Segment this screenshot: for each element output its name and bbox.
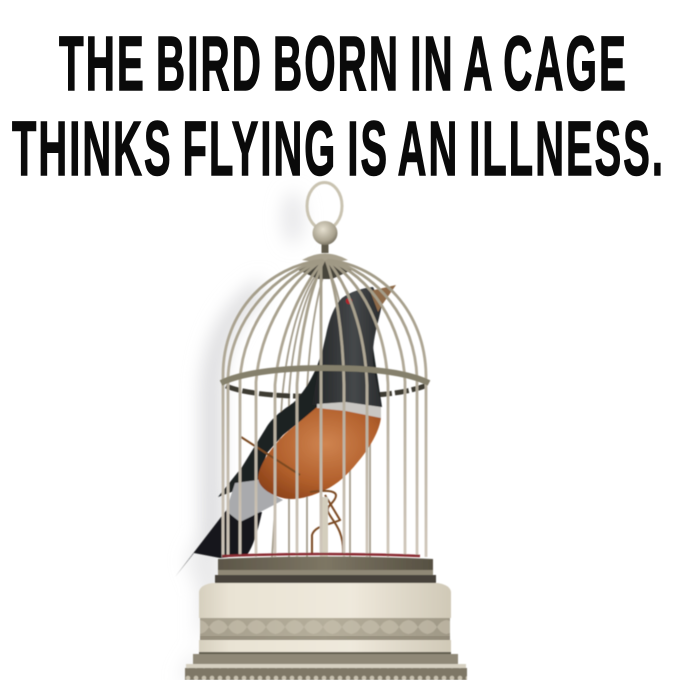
cage floor bbox=[222, 554, 420, 556]
bird bbox=[175, 285, 396, 577]
dome cap bbox=[296, 254, 354, 279]
pedestal bbox=[185, 556, 467, 680]
pedestal cream drum bbox=[199, 583, 451, 618]
pedestal bead band bbox=[185, 668, 467, 680]
title bbox=[12, 21, 665, 192]
pedestal top plate bbox=[215, 556, 436, 583]
bird eye bbox=[346, 298, 352, 304]
bird head and neck bbox=[312, 287, 382, 407]
cage front bars bbox=[223, 260, 426, 557]
perch bbox=[320, 497, 328, 557]
bird beak bbox=[370, 285, 396, 312]
illustration: bird in cage bbox=[175, 182, 467, 680]
cage back hoop bbox=[226, 386, 425, 396]
bird collar bbox=[317, 402, 381, 418]
bird belly bbox=[258, 407, 381, 499]
bird wing bbox=[218, 347, 382, 497]
pedestal lower ledge bbox=[186, 640, 466, 668]
bird legs bbox=[241, 437, 343, 555]
bird undertail bbox=[226, 480, 283, 522]
cage hoop bbox=[221, 368, 429, 383]
cage back bars bbox=[272, 268, 370, 557]
pedestal ornament band bbox=[200, 618, 450, 640]
wall shadow of cage bbox=[178, 192, 303, 680]
cage finial ball bbox=[312, 221, 338, 253]
bird tail bbox=[175, 508, 262, 577]
hanging ring bbox=[307, 182, 342, 230]
